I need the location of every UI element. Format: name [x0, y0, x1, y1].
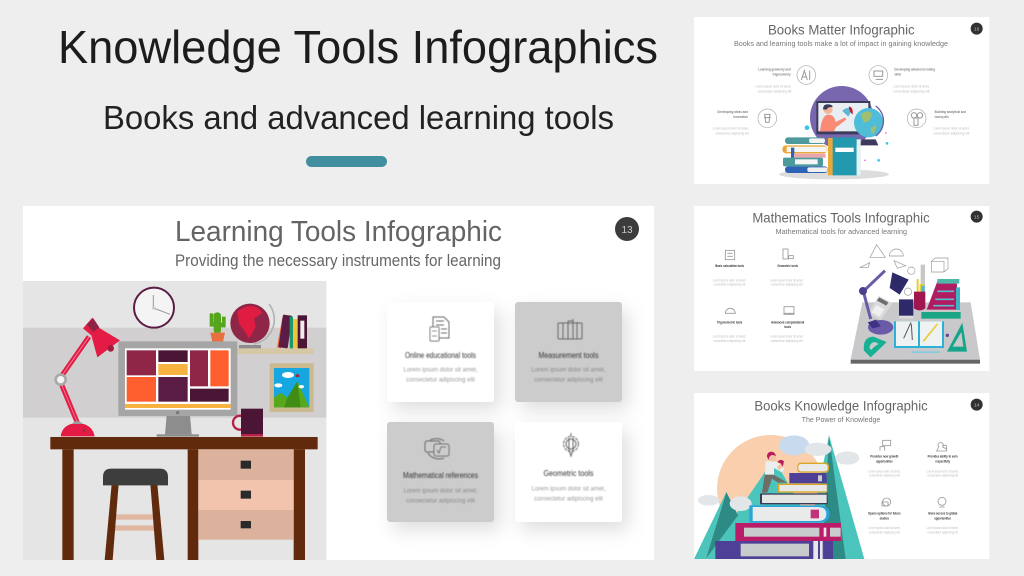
illustration: climbing a book mountain — [694, 435, 864, 559]
panel: mathematics tools slide: consectetur adipiscing elit — [713, 283, 745, 287]
card: geometric tools — [515, 422, 622, 522]
panel: learning tools slide — [23, 206, 654, 560]
panel: books matter slide: consectetur adipiscing elit — [893, 90, 929, 94]
panel: books matter slide: consectetur adipiscing elit — [715, 132, 749, 136]
feature icons — [880, 440, 947, 507]
slide subheading: Providing the necessary instruments for learning — [175, 251, 501, 270]
card body text: Lorem ipsum dolor sit amet, — [531, 368, 606, 374]
computer monitor — [118, 341, 237, 437]
icon: rulers — [558, 319, 582, 339]
globe — [230, 304, 274, 348]
card: online educational tools — [387, 302, 494, 402]
subtitle: Books and advanced learning tools — [103, 99, 614, 136]
panel: books knowledge slide: Lorem ipsum dolor sit amet, — [927, 469, 959, 473]
feature text: Trigonometric tools — [717, 320, 742, 324]
panel: mathematics tools slide: consectetur adipiscing elit — [771, 339, 803, 343]
slide heading: Learning Tools Infographic — [175, 216, 502, 248]
page number badge: 16 — [974, 27, 980, 33]
page number badge — [971, 211, 983, 223]
panel: books knowledge slide: Lorem ipsum dolor sit amet, — [927, 526, 959, 530]
framed picture — [270, 363, 314, 412]
card: mathematical references — [387, 422, 494, 522]
feature text: studies — [880, 516, 889, 520]
feature text: Advanced computational — [771, 320, 804, 324]
panel: books matter slide: Lorem ipsum dolor sit amet, — [755, 85, 791, 89]
card body text: Lorem ipsum dolor sit amet, — [403, 488, 478, 494]
icon: gear and compass — [564, 433, 578, 456]
panel: books knowledge slide: consectetur adipiscing elit — [869, 530, 900, 534]
illustration: desk scene — [23, 281, 326, 560]
panel: mathematics tools slide: Lorem ipsum dolor sit amet, — [770, 278, 803, 282]
feature text — [717, 68, 966, 119]
stool — [103, 469, 168, 560]
feature text: tools — [784, 325, 791, 329]
card body text — [403, 488, 478, 504]
panel: mathematics tools slide: consectetur adipiscing elit — [713, 339, 745, 343]
page number badge — [971, 399, 983, 411]
panel: books matter slide: Lorem ipsum dolor sit amet, — [713, 127, 749, 131]
panel: books knowledge slide: consectetur adipiscing elit — [927, 474, 958, 478]
card body text — [403, 368, 478, 384]
feature text: skills — [894, 73, 901, 77]
panel: books matter slide: consectetur adipiscing elit — [758, 90, 791, 94]
feature text: Gives access to global — [928, 511, 957, 515]
panel: books matter slide: Lorem ipsum dolor sit amet, — [933, 127, 969, 131]
card body text: consectetur adipiscing elit — [406, 498, 475, 504]
panel: books matter slide: consectetur adipiscing elit — [933, 132, 969, 136]
books — [277, 315, 307, 348]
drawers — [198, 449, 294, 540]
coffee mug — [233, 409, 263, 437]
panel: mathematics tools slide: Lorem ipsum dolor sit amet, — [713, 335, 746, 339]
card: measurement tools — [515, 302, 622, 402]
thumbnail heading: Mathematics Tools Infographic — [752, 209, 930, 225]
card body text — [531, 368, 606, 384]
icon: math bubbles — [425, 439, 449, 459]
panel: books knowledge slide: Lorem ipsum dolor sit amet, — [868, 526, 900, 530]
panel: books knowledge slide: consectetur adipiscing elit — [869, 474, 900, 478]
feature text: Geometric tools — [777, 264, 798, 268]
icon: document and tablet — [430, 317, 449, 341]
feature text: trigonometry — [773, 73, 791, 77]
feature text: innovation — [733, 115, 748, 119]
panel: mathematics tools slide: consectetur adipiscing elit — [771, 283, 803, 287]
panel: books knowledge slide — [694, 393, 989, 559]
card label: Online educational tools — [405, 351, 476, 360]
feature text: opportunities — [876, 460, 893, 464]
feature text: Learning geometry and — [758, 68, 791, 72]
card label: Geometric tools — [544, 469, 594, 478]
card body text: consectetur adipiscing elit — [406, 378, 475, 384]
feature text: Provides ability to earn — [928, 455, 958, 459]
feature icons — [758, 66, 926, 128]
card label: Measurement tools — [538, 351, 599, 360]
feature text: reasoning skills — [935, 115, 949, 119]
panel: books matter slide: Lorem ipsum dolor sit amet, — [893, 85, 929, 89]
panel: mathematics tools slide: Lorem ipsum dolor sit amet, — [713, 278, 746, 282]
page number badge — [615, 217, 639, 241]
feature text — [868, 455, 958, 520]
feature text: Developing ideas and — [717, 110, 748, 114]
panel: mathematics tools slide — [694, 206, 989, 371]
feature text: Building analytical and — [935, 110, 966, 114]
illustration: maths tools on table — [851, 245, 980, 364]
feature text: Developing advanced coding — [894, 68, 935, 72]
illustration: teacher screen, globe and books — [779, 86, 889, 179]
page number badge: 15 — [974, 215, 980, 221]
desk — [50, 437, 318, 560]
panel: books matter slide — [694, 17, 989, 184]
card body text: Lorem ipsum dolor sit amet, — [531, 486, 606, 492]
feature text — [715, 264, 804, 329]
card body text — [531, 486, 606, 502]
card body text: Lorem ipsum dolor sit amet, — [403, 368, 478, 374]
feature text: Provides new growth — [870, 455, 898, 459]
thumbnail heading: Books Matter Infographic — [768, 21, 915, 37]
feature text: Basic calculation tools — [715, 264, 744, 268]
feature icons — [725, 249, 795, 314]
card label: Mathematical references — [403, 471, 478, 480]
thumbnail subheading: Mathematical tools for advanced learning — [776, 227, 907, 236]
panel: mathematics tools slide: Lorem ipsum dolor sit amet, — [770, 335, 803, 339]
page number badge: 13 — [621, 225, 633, 236]
panel: books knowledge slide: consectetur adipiscing elit — [927, 530, 958, 534]
feature text: respectfully — [935, 460, 951, 464]
accent pill — [306, 156, 387, 167]
card body text: consectetur adipiscing elit — [534, 496, 603, 502]
page number badge: 14 — [974, 403, 980, 409]
desk lamp — [56, 318, 120, 436]
main title: Knowledge Tools Infographics — [58, 21, 658, 73]
clock — [134, 288, 174, 328]
feature text: Opens options for future — [868, 511, 901, 515]
panel: books knowledge slide: Lorem ipsum dolor sit amet, — [868, 469, 900, 473]
thumbnail heading: Books Knowledge Infographic — [754, 397, 928, 413]
shelf — [237, 348, 314, 354]
cactus — [210, 312, 226, 342]
card body text: consectetur adipiscing elit — [534, 378, 603, 384]
thumbnail subheading: The Power of Knowledge — [802, 415, 880, 424]
thumbnail subheading: Books and learning tools make a lot of impact in gaining knowledge — [734, 39, 948, 48]
page number badge — [971, 23, 983, 35]
feature text: opportunities — [934, 516, 951, 520]
